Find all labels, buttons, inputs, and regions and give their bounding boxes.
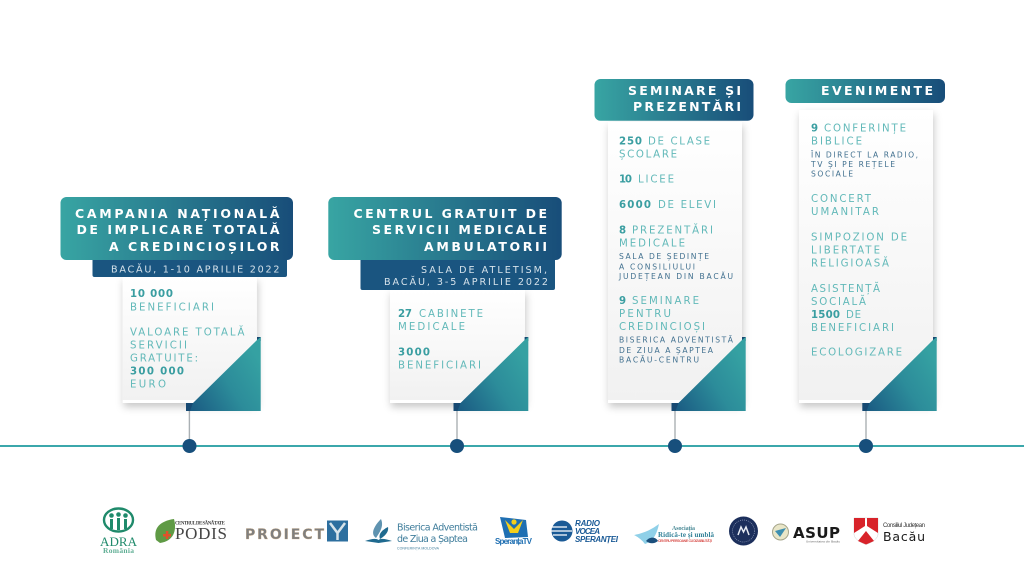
logo: ASUP	[772, 524, 840, 544]
card 3 text: JUDEȚEAN DIN BACĂU	[618, 272, 733, 282]
card 1 text: SERVICII	[130, 341, 187, 352]
logo: ADRA România: ADRA	[100, 534, 138, 549]
card 1 text: GRATUITE:	[130, 354, 198, 365]
heading 3: SEMINARE ȘI	[628, 83, 741, 98]
logo: Radio Vocea Speranței	[551, 519, 619, 544]
card 3 text: A CONSILIULUI	[619, 262, 695, 272]
panel: evenimente	[786, 79, 945, 453]
card 4 text: TV ȘI PE REȚELE	[810, 160, 895, 170]
logo: round navy seal	[729, 516, 758, 546]
card 3 text: 8	[619, 226, 626, 237]
card 4 text: SOCIALĂ	[811, 295, 866, 308]
heading 1	[60, 197, 293, 260]
card 2 text	[398, 309, 483, 372]
card 1 text: 10 000	[130, 289, 173, 300]
card 3 text: LICEE	[638, 175, 674, 186]
card 4 text: ECOLOGIZARE	[811, 348, 902, 359]
heading 1: DE IMPLICARE TOTALĂ	[76, 222, 280, 237]
card 1 text: EURO	[130, 380, 166, 390]
content card 1	[123, 277, 257, 403]
heading 3	[594, 79, 754, 121]
card 1 text: 300 000	[130, 367, 184, 378]
content card 3	[608, 122, 742, 403]
card 4 text: SIMPOZION DE	[811, 233, 907, 244]
panel: centrul gratuit	[328, 197, 562, 453]
card 3 text: SEMINARE	[632, 296, 699, 307]
card 4 text: DE	[846, 310, 861, 321]
card 2 text: MEDICALE	[398, 322, 465, 333]
card 3 text: BISERICA ADVENTISTĂ	[619, 336, 734, 345]
card 2 text: BENEFICIARI	[398, 361, 481, 372]
content card 4	[799, 110, 933, 403]
panel: seminare și prezentări	[594, 79, 754, 453]
logo: Proiect M	[245, 520, 348, 543]
logo: Ridică-te și umblă: Ridică-te și umblă	[658, 531, 714, 539]
card 3 text: PENTRU	[619, 309, 671, 320]
heading 4	[786, 79, 945, 103]
connector and marker 2	[450, 411, 464, 453]
card 4 text: UMANITAR	[811, 207, 879, 218]
card 3 text: ȘCOLARE	[619, 149, 677, 160]
logo: PODIS	[155, 519, 227, 543]
corner triangle 1	[186, 337, 261, 411]
logo: Ridică-te și umblă	[634, 524, 714, 544]
heading 2: AMBULATORII	[424, 239, 547, 254]
logo: Ridică-te și umblă: Asociația	[672, 526, 695, 532]
card 4 text: BENEFICIARI	[811, 323, 894, 334]
logo: ASUP: ASUP	[793, 524, 840, 542]
card 2 text: 27	[398, 309, 412, 320]
connector and marker 4	[859, 411, 873, 453]
logo: Consiliul Județean Bacău: Bacău	[883, 529, 925, 544]
logo: Consiliul Județean Bacău	[854, 518, 925, 544]
corner triangle 2	[454, 337, 528, 411]
card 4 text: ÎN DIRECT LA RADIO,	[811, 150, 918, 159]
logo: Biserica Adventistă: CONFERINȚA MOLDOVA	[397, 546, 440, 550]
heading 4: EVENIMENTE	[821, 83, 933, 98]
date banner 2	[360, 260, 555, 290]
card 3 text: CREDINCIOȘI	[619, 322, 705, 333]
card 1 text: BENEFICIARI	[130, 302, 214, 313]
card 3 text: 6000	[619, 200, 651, 211]
card 4 text: CONCERT	[811, 194, 872, 205]
connector and marker 3	[668, 411, 682, 453]
corner triangle 3	[672, 337, 746, 411]
card 3 text: DE ZIUA A ȘAPTEA	[619, 346, 714, 355]
card 4 text: 1500	[811, 310, 840, 321]
logo: Biserica Adventistă: de Ziua a Șaptea	[397, 534, 468, 545]
date banner 2: BACĂU, 3-5 APRILIE 2022	[384, 275, 548, 288]
heading 1: CAMPANIA NAȚIONALĂ	[75, 206, 280, 221]
logo: Proiect M: PROIECT	[245, 527, 324, 543]
card 3 text: 9	[619, 296, 626, 307]
heading 3: PREZENTĂRI	[633, 99, 741, 114]
date banner 1: BACĂU, 1-10 APRILIE 2022	[111, 263, 280, 276]
panel: campania națională	[60, 197, 293, 453]
logo: Radio Vocea Speranței: VOCEA	[575, 527, 600, 536]
card 1 text	[130, 289, 245, 390]
card 3 text: DE ELEVI	[658, 200, 716, 211]
logo: Radio Vocea Speranței: RADIO	[575, 519, 601, 528]
card 4 text	[810, 124, 918, 359]
card 3 text	[618, 136, 734, 365]
card 3 text: DE CLASE	[648, 136, 710, 147]
logo strip	[100, 508, 925, 555]
card 3 text: PREZENTĂRI	[632, 224, 713, 237]
content card 2	[390, 290, 525, 403]
logo: ADRA România	[100, 508, 138, 555]
heading 1: A CREDINCIOȘILOR	[109, 239, 280, 254]
logo: ADRA România: România	[103, 546, 134, 555]
heading 2: SERVICII MEDICALE	[372, 222, 547, 237]
date banner 1	[92, 260, 287, 277]
corner triangle 4	[862, 337, 937, 411]
card 4 text: 9	[811, 124, 818, 135]
card 1 text: VALOARE TOTALĂ	[130, 326, 245, 339]
card 2 text: CABINETE	[419, 309, 483, 320]
card 4 text: LIBERTATE	[811, 246, 880, 257]
card 3 text: MEDICALE	[619, 238, 685, 250]
card 4 text: BIBLICE	[811, 137, 862, 148]
card 3 text: BACĂU-CENTRU	[619, 356, 699, 365]
date banner 2: SALA DE ATLETISM,	[421, 265, 547, 276]
card 2 text: 3000	[398, 348, 430, 359]
logo: Biserica Adventistă: Biserica Adventistă	[397, 522, 478, 534]
card 4 text: RELIGIOASĂ	[811, 256, 889, 270]
card 4 text: SOCIALE	[811, 170, 853, 178]
card 4 text: ASISTENȚĂ	[811, 282, 880, 295]
timeline line	[0, 445, 1024, 447]
card 3 text: SALA DE ȘEDINȚE	[619, 252, 709, 262]
logo: Speranța TV	[495, 517, 533, 546]
logo: Consiliul Județean Bacău: Consiliul Județean	[883, 523, 925, 529]
logo: PODIS: CENTRUL DE SĂNĂTATE	[175, 520, 226, 526]
heading 2	[328, 197, 562, 260]
logo: Biserica Adventistă	[365, 519, 478, 550]
logo: Radio Vocea Speranței: SPERANȚEI	[575, 535, 619, 544]
logo: Ridică-te și umblă: CENTRU PERSOANE CU DIZABILITĂȚI	[658, 538, 712, 543]
card 3 text: 250	[619, 136, 642, 147]
card 3 text: 10	[619, 175, 632, 186]
logo: ASUP: Universitatea din Bacău	[806, 540, 840, 544]
card 4 text: CONFERINȚE	[824, 124, 906, 135]
heading 2: CENTRUL GRATUIT DE	[354, 206, 547, 221]
connector and marker 1	[182, 411, 196, 453]
logo: PODIS: PODIS	[175, 524, 227, 543]
logo: Speranța TV: SperanțaTV	[495, 537, 533, 546]
